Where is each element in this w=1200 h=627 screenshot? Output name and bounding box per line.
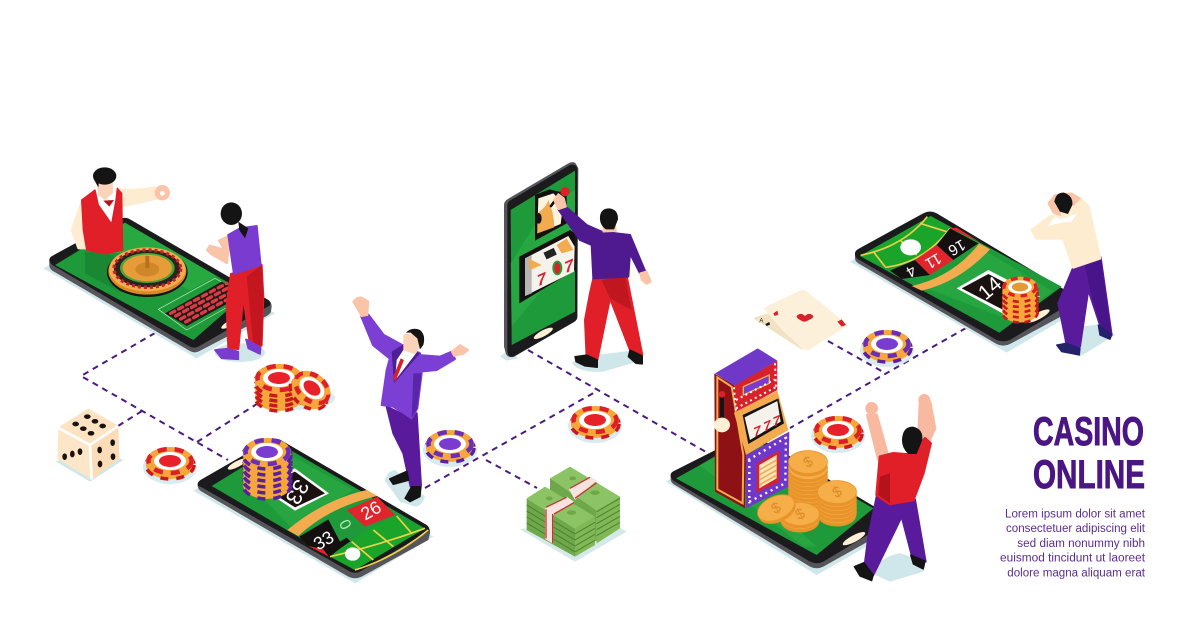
phone: slot machine game vertical [500,162,578,361]
trousers [387,407,421,487]
shirt [877,438,931,504]
player woman in purple top [207,202,265,362]
icon: red chip stacks [255,364,337,416]
title [1033,410,1145,497]
phone: roulette table with chips [850,212,1082,353]
purple chip stack on phone [243,438,291,499]
description text: sed diam nonummy nibh [1017,538,1145,550]
back stack [550,467,620,543]
title: ONLINE [1033,453,1145,497]
slot reels: 7 [537,268,546,291]
roulette number track: 11 [922,249,944,272]
phone: slot machine and coin stacks [666,348,898,575]
shoes [854,563,873,581]
hands and head [353,297,468,356]
phone: live roulette with dealer and player [43,167,275,362]
description text [1000,508,1146,580]
phone body [666,433,898,575]
shoes [575,355,597,367]
slot machine [714,348,789,508]
description text: dolore magna aliquam erat [1007,568,1146,580]
icon: playing cards [755,291,847,349]
number ticket 33: 33 [280,475,314,509]
hands [1048,193,1080,215]
roulette number track [885,228,990,291]
lever ball [551,187,570,206]
phone body [193,439,433,583]
roulette wheel [107,247,188,297]
roulette number track: 0 [335,517,354,533]
gold coin stacks: $ [800,453,817,472]
icon: purple chip by card [860,330,914,367]
slot lever panel [535,189,567,241]
red trousers [585,276,642,360]
player in purple suit with raised arms [353,297,468,507]
icon: purple chip [423,430,477,467]
phone: roulette bets with chip stack [193,439,433,583]
phone body [850,212,1082,353]
icon: orange and red chip stack on phone [1002,277,1038,323]
icon: playing cards: A [759,319,763,325]
gold coin stacks: $ [792,505,809,524]
icon: red chip near money [568,406,622,443]
slot reels: 7 [564,254,574,278]
jacket and arms [362,315,455,418]
floor shadow [572,350,643,372]
head hair [902,427,922,454]
shirt and arms [558,206,645,278]
icon: dice [56,410,123,482]
number ticket 14: 14 [974,272,1006,305]
head hair [1054,193,1072,214]
shoes [390,472,408,484]
head hair [600,208,618,229]
gold coin stacks: $ [768,499,785,518]
trousers [864,497,926,575]
description text: euismod tincidunt ut laoreet [1000,552,1146,564]
shoes [1057,343,1080,355]
slot machine: 7 [773,412,781,431]
icon: cash stacks [520,467,627,562]
trousers [1058,257,1112,347]
cream shirt and arms [1032,198,1100,267]
floor shadow [872,553,925,582]
winner in red shirt with raised fists [854,395,935,582]
hands [554,194,651,284]
phone body [500,162,578,361]
phone body [43,218,275,358]
betting layout [158,278,247,330]
description text: Lorem ipsum dolor sit amet [1005,508,1146,520]
roulette number track [287,490,395,557]
wheel cells and ball [330,516,428,570]
arms [867,395,935,459]
floor shadow [1057,324,1115,357]
dashed connector network left [81,328,966,488]
number ticket 14 [957,270,1040,317]
front stack [527,487,595,557]
description text: consectetuer adipiscing elit [1006,523,1146,535]
roulette number track: 16 [945,236,968,259]
roulette number track: 33 [310,527,337,554]
number ticket 33 [258,468,329,511]
floor shadow [385,470,425,507]
roulette number track: 4 [902,261,919,281]
roulette wheel cells and ball [860,216,950,267]
title: CASINO [1033,410,1144,454]
player operating slot on phone [551,187,651,372]
gold coin stacks [753,450,856,532]
distressed player holding head [1032,193,1115,357]
slot reels [519,230,575,303]
slot machine: 7 [753,423,761,442]
icon: red chip by dice [143,447,197,484]
gold coin stacks: $ [829,483,846,502]
body reflection on the phone [85,252,123,293]
dealer in red vest [72,167,170,254]
slot machine: 7 [763,417,771,436]
icon: red chip by slot machine [811,416,865,453]
gap between arm and head [1047,213,1077,226]
roulette number track: 26 [357,497,385,524]
